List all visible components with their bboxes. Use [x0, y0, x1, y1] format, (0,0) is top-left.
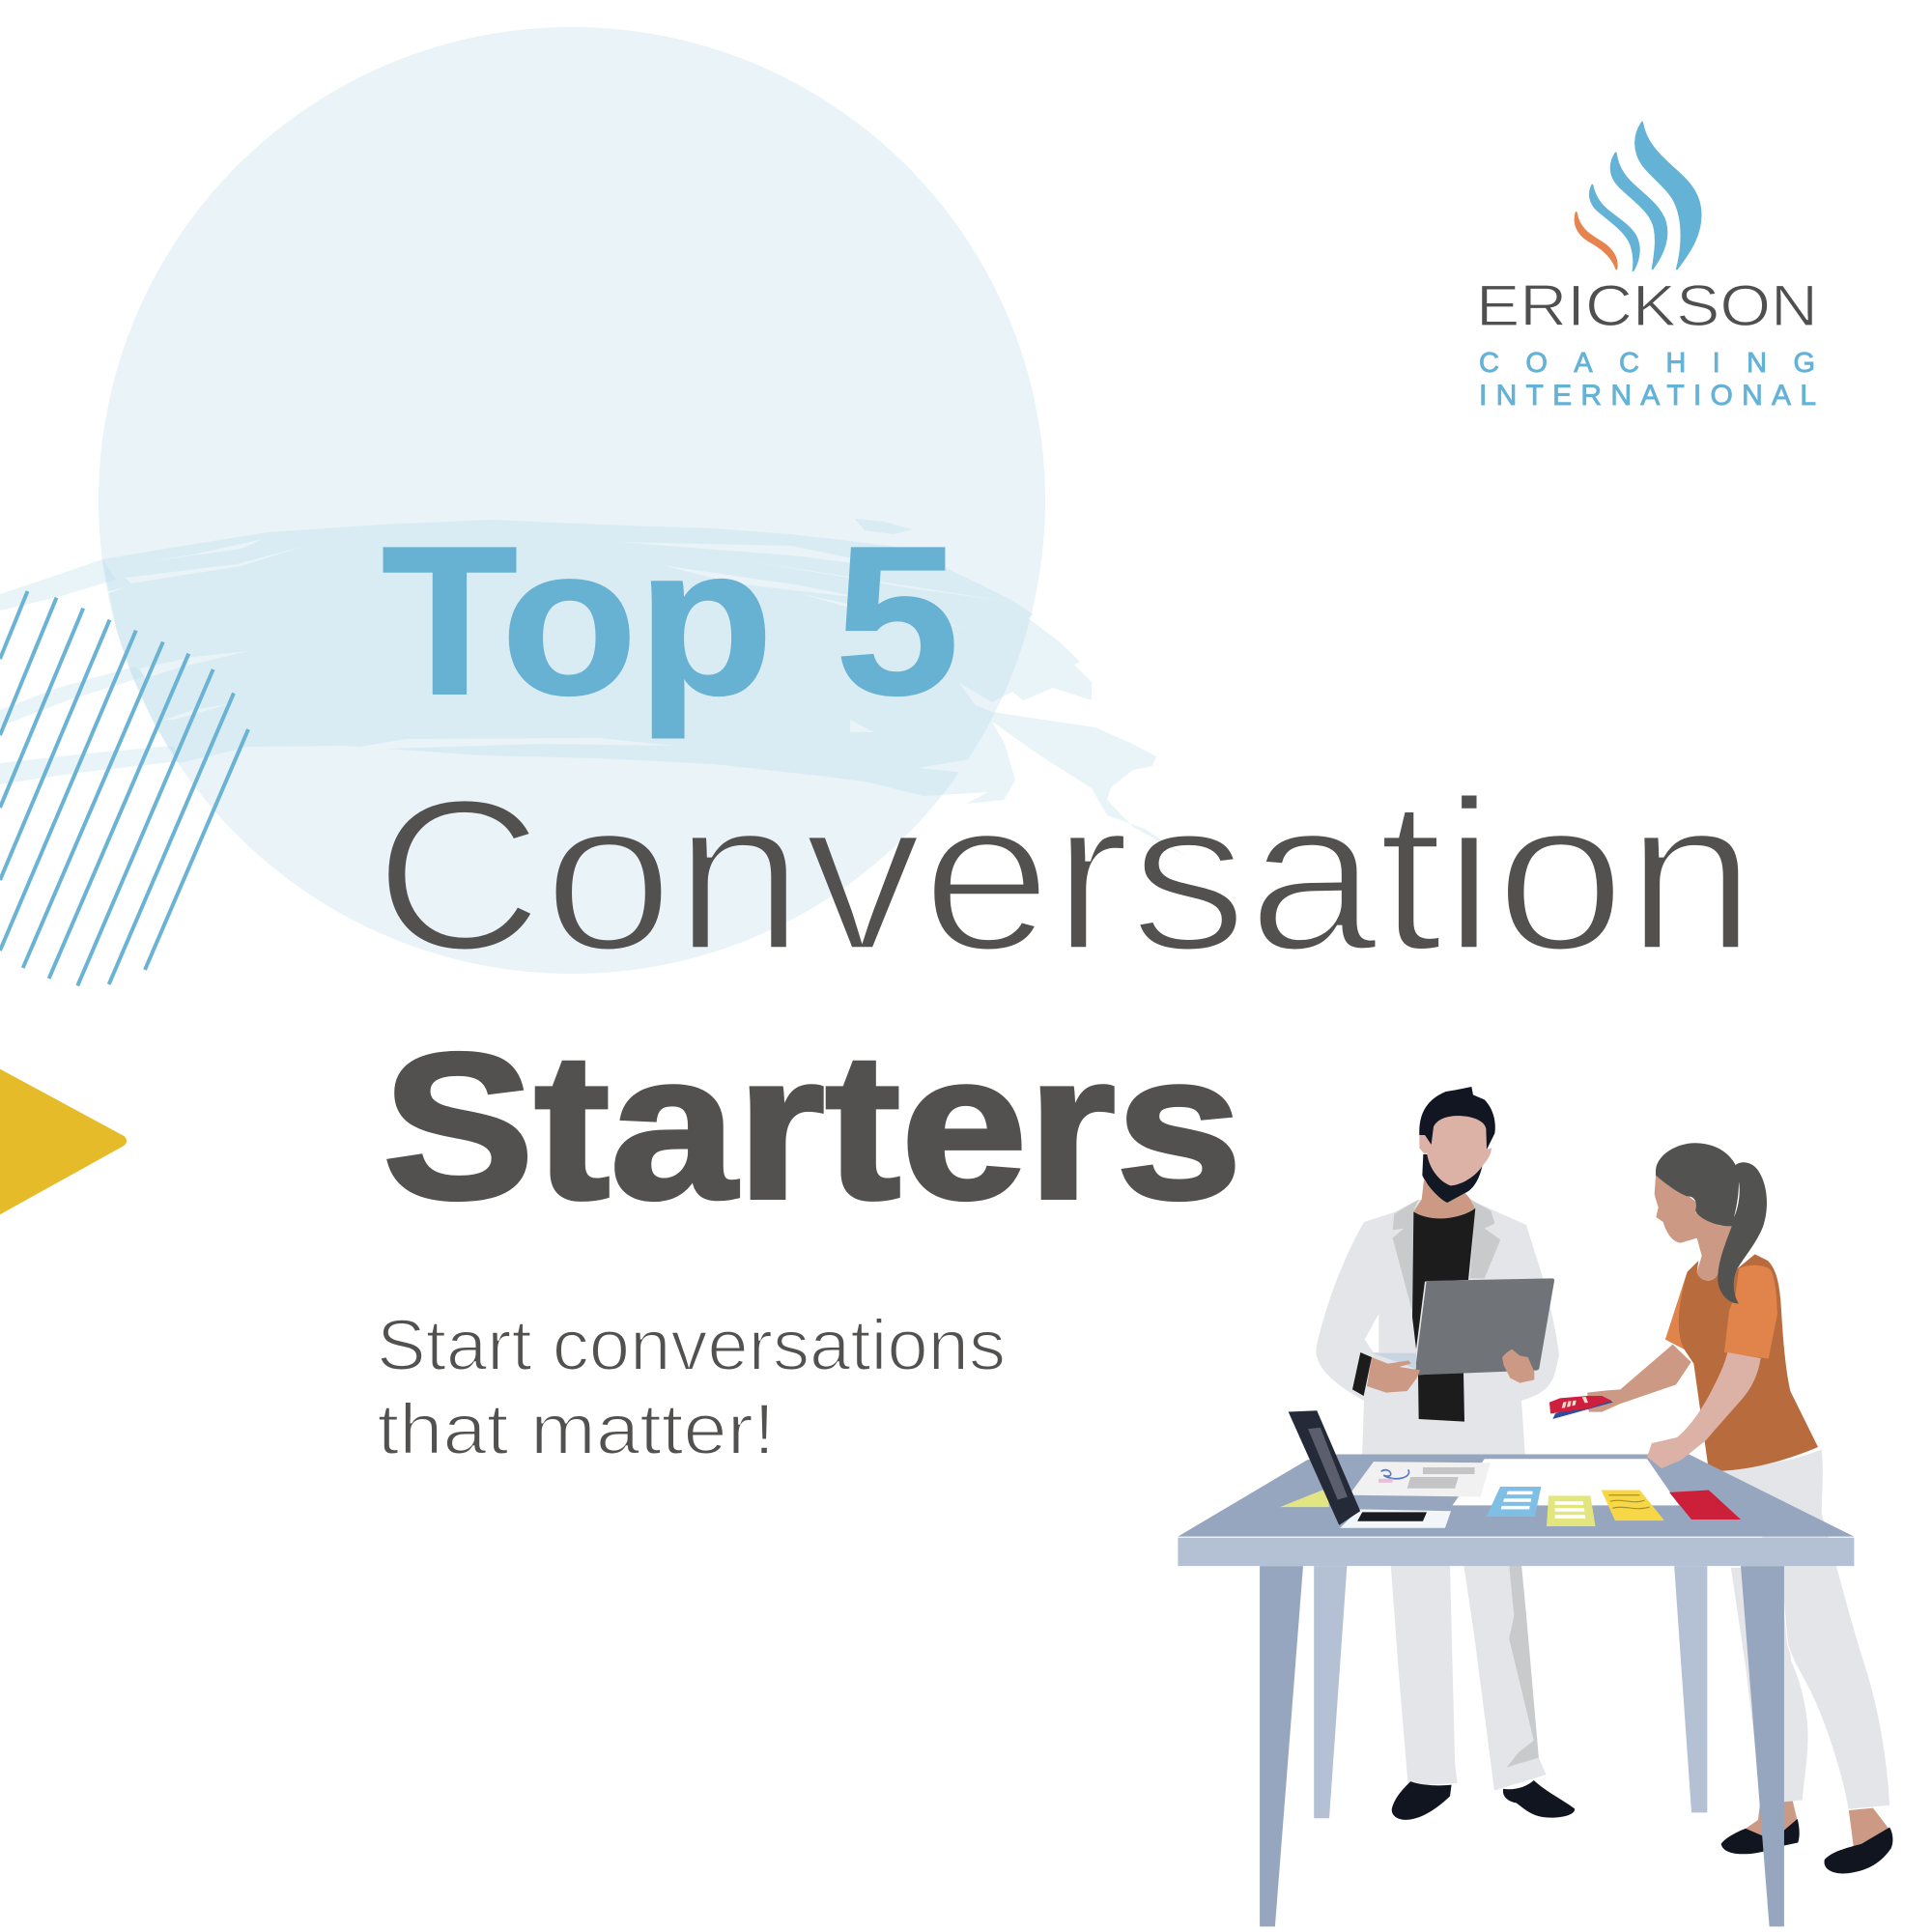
woman legs: [1717, 1449, 1892, 1873]
yellow triangle: [0, 1070, 121, 1213]
man legs and shoes: [1391, 1565, 1575, 1820]
woman upper body: [1549, 1143, 1818, 1471]
diagonal stripes: [0, 591, 248, 985]
subtitle: Start conversations: [377, 1305, 1006, 1385]
logo wordmark: ERICKSON: ERICKSON: [1476, 273, 1818, 338]
logo wordmark: INTERNATIONAL: INTERNATIONAL: [1479, 380, 1816, 412]
icon: flame: [1576, 123, 1701, 270]
title: Top 5: Top 5: [382, 503, 959, 739]
logo: [1476, 123, 1818, 412]
papers on table: [1280, 1459, 1741, 1526]
illustration: people at table: [1178, 1087, 1892, 1926]
laptop on table: [1289, 1410, 1451, 1528]
logo wordmark: COACHING: COACHING: [1479, 348, 1815, 379]
title: Starters: Starters: [383, 1009, 1242, 1242]
brush stroke: [0, 519, 1187, 857]
table: [1178, 1455, 1854, 1926]
subtitle: that matter!: [377, 1389, 775, 1469]
man jacket: [1316, 1200, 1559, 1459]
woman front arm: [1647, 1352, 1761, 1468]
background circle: [99, 27, 1045, 974]
title: Conversation: Conversation: [374, 754, 1756, 996]
subtitle: [379, 1319, 1003, 1453]
man upper body: [1352, 1087, 1554, 1422]
